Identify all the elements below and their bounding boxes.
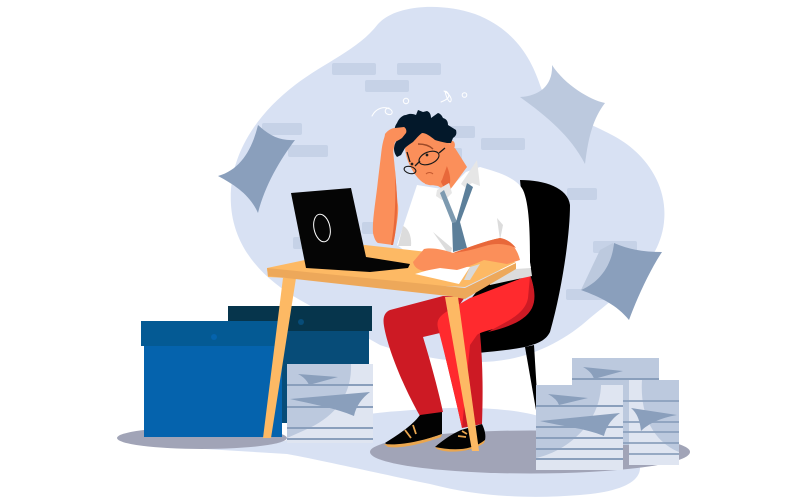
- chair: [470, 180, 570, 410]
- collar: [436, 183, 452, 200]
- tie: [440, 183, 473, 252]
- eyebrow: [418, 144, 433, 149]
- arm shadow: [391, 175, 397, 245]
- mouth: [426, 172, 433, 174]
- forearm shadow: [453, 238, 516, 253]
- floor shadow: right: [370, 430, 690, 474]
- shoe: far: [384, 412, 442, 447]
- front storage box: [141, 321, 282, 437]
- near leg shin: [438, 300, 483, 428]
- neck: [425, 148, 467, 192]
- background blob: [231, 7, 664, 362]
- hair: [394, 110, 456, 157]
- wall bricks: [262, 63, 637, 300]
- arm holding head: [373, 133, 398, 245]
- forearm on desk: [413, 238, 520, 271]
- flying paper: right: [581, 243, 662, 320]
- ear: [449, 141, 455, 153]
- paper stack: right side: [623, 380, 679, 465]
- back storage box: [228, 306, 372, 423]
- flying paper: top right: [520, 65, 605, 164]
- paper stack: right front: [536, 385, 623, 470]
- paper stack: left: [287, 364, 373, 443]
- table leg: right: [445, 297, 479, 451]
- glasses: [403, 148, 445, 175]
- laptop: [291, 188, 410, 272]
- shirt folds: [398, 218, 503, 256]
- person: [373, 110, 534, 452]
- face: [405, 131, 450, 185]
- near leg: [437, 275, 534, 428]
- paper stack: right back: [572, 358, 659, 388]
- desk paper: [415, 264, 480, 284]
- doodle squiggles: [372, 91, 467, 116]
- far leg: [384, 296, 465, 416]
- shirt: [397, 167, 531, 272]
- table: [267, 245, 516, 299]
- hand on hair: [383, 127, 406, 152]
- floor blob: [205, 408, 640, 497]
- floor shadow: left: [117, 427, 287, 449]
- table leg: left: [263, 278, 296, 438]
- shirt lower shadow: [480, 262, 532, 285]
- flying paper: left: [218, 125, 295, 213]
- shoe: near: [435, 424, 485, 452]
